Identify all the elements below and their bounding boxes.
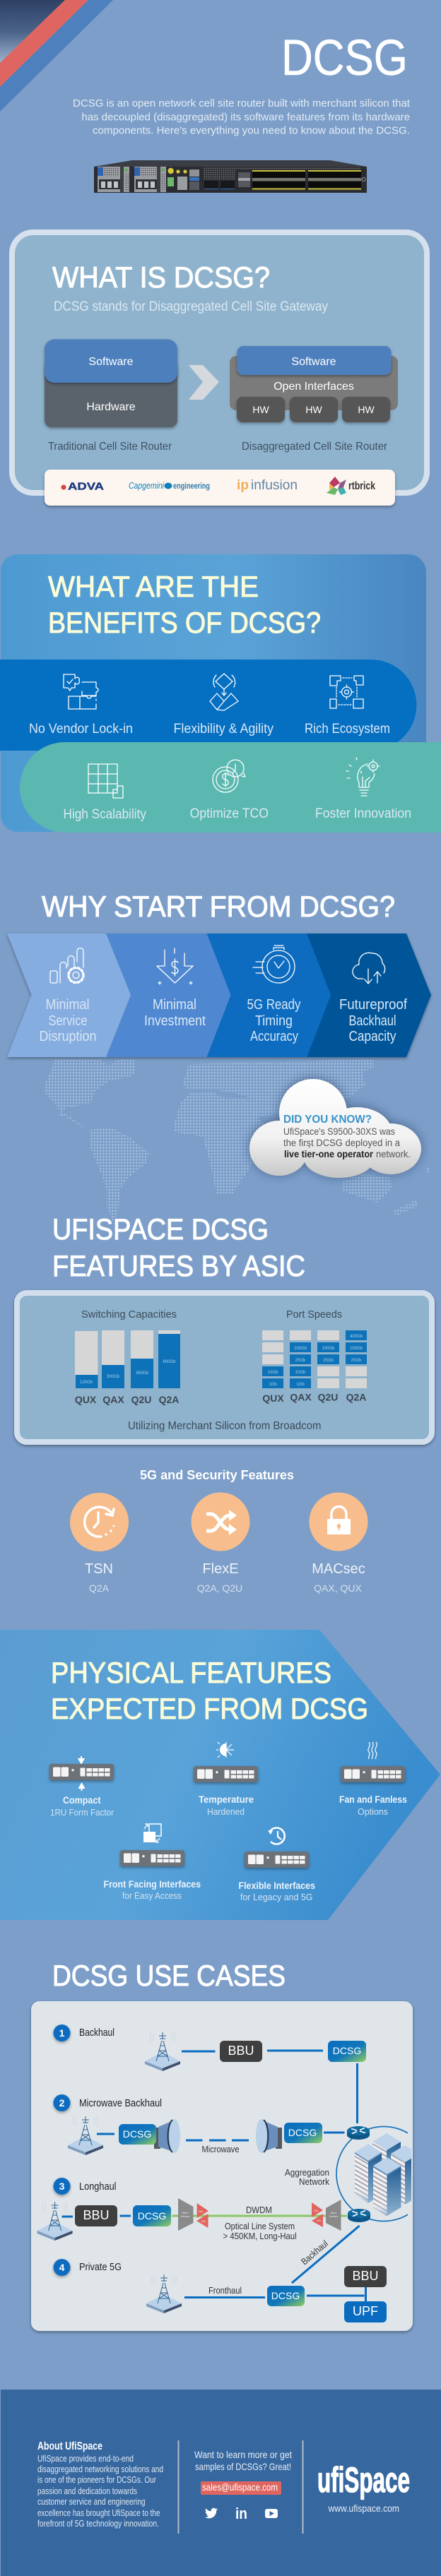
- diagram: traditional router: Hardware: [86, 401, 136, 413]
- callout: did you know cloud: the first DCSG deployed in a: [283, 1138, 400, 1148]
- feature: FlexE: Q2A, Q2U: [197, 1582, 242, 1594]
- use case 3: longhaul: Optical Line System: [225, 2221, 295, 2231]
- contact block: [194, 2449, 292, 2522]
- footer: [1, 2390, 441, 2576]
- callout: did you know cloud: live tier-one operator: [284, 1149, 374, 1159]
- chart: port speeds: 1Gb: [296, 1383, 305, 1387]
- use case 3: longhaul: OA: [199, 2210, 203, 2213]
- chart: switching capacities: Q2A: [159, 1394, 179, 1405]
- chart: port speeds: 100Gb: [294, 1347, 307, 1351]
- chart: switching capacities: 360Gb: [136, 1371, 149, 1376]
- use case 1: backhaul: BBU: [228, 2044, 254, 2058]
- feature: temperature hardened: Temperature: [199, 1794, 254, 1805]
- green band: [20, 742, 441, 833]
- benefit: rich ecosystem: Rich Ecosystem: [305, 722, 390, 737]
- icon: linkedin: in: [235, 2505, 247, 2522]
- callout: did you know cloud: [249, 1079, 421, 1178]
- use case 3: longhaul: OA: [314, 2209, 318, 2212]
- diagram: disaggregated router: [230, 346, 398, 422]
- chevron: minimal service disruption: Minimal: [45, 997, 89, 1013]
- feature: front facing interfaces: Front Facing Interfaces: [103, 1878, 201, 1890]
- heading: benefits: [48, 570, 321, 639]
- use case 3: longhaul: Longhaul: [79, 2181, 116, 2193]
- chevron: futureproof backhaul capacity: Backhaul: [349, 1013, 396, 1029]
- title: DCSG: DCSG: [281, 30, 408, 86]
- chart: port speeds: 400Gb: [350, 1335, 363, 1339]
- chart: port speeds: [262, 1308, 367, 1404]
- feature: compact: Compact: [63, 1794, 101, 1806]
- panel: use cases diagram: [31, 2001, 431, 2331]
- partner logo strip: ADVA: [68, 480, 104, 493]
- chevron: 5G ready timing accuracy: 5G Ready: [247, 997, 301, 1013]
- diagram: traditional router: [45, 339, 177, 427]
- chevron: futureproof backhaul capacity: [339, 953, 407, 1044]
- heading: features by ASIC: FEATURES BY ASIC: [52, 1249, 305, 1282]
- heading: features by ASIC: UFISPACE DCSG: [52, 1212, 269, 1246]
- chart: port speeds: 100Gb: [322, 1347, 335, 1351]
- blue band: [0, 660, 416, 751]
- callout: did you know cloud: DID YOU KNOW?: [283, 1114, 372, 1126]
- heading: use cases: DCSG USE CASES: [52, 1959, 286, 1992]
- chart: port speeds: 25Gb: [351, 1359, 362, 1363]
- diagram: traditional router: Software: [88, 356, 134, 368]
- chart: switching capacities: QAX: [102, 1394, 124, 1405]
- use case 2: microwave backhaul: Microwave: [202, 2144, 239, 2154]
- use case 4: private 5G: [54, 2259, 387, 2322]
- feature: fan and fanless: Fan and Fanless: [339, 1794, 407, 1805]
- feature: temperature hardened: [194, 1742, 258, 1817]
- feature: TSN: [70, 1493, 129, 1594]
- heading: features by ASIC: [52, 1212, 305, 1282]
- feature: fan and fanless: Options: [358, 1806, 388, 1817]
- benefit: foster innovation: Foster Innovation: [315, 806, 411, 821]
- chevron: 5G ready timing accuracy: [247, 946, 301, 1044]
- chart: port speeds: Q2U: [318, 1391, 338, 1402]
- diagram: disaggregated router: HW: [305, 404, 322, 415]
- partner logo strip: Capgemini: [129, 480, 165, 491]
- label: backhaul link: Backhaul: [299, 2238, 330, 2267]
- heading: what is DCSG: WHAT IS DCSG?: [52, 261, 270, 294]
- chevron: minimal service disruption: Disruption: [40, 1029, 96, 1044]
- chevron process: [7, 934, 431, 1057]
- router: bottom aggregation: [348, 2209, 370, 2222]
- chevron: minimal investment: Minimal: [153, 997, 196, 1013]
- use case 3: longhaul: OA: [317, 2219, 321, 2222]
- partner logo strip: ip: [237, 478, 249, 493]
- use case 2: microwave backhaul: Microwave Backhaul: [79, 2097, 162, 2109]
- feature: TSN: TSN: [85, 1561, 113, 1577]
- intro text block: has decoupled (disaggregated) its software features from its hardware: [82, 112, 410, 123]
- world map dots: [44, 1059, 430, 1222]
- chart: port speeds: 1Gb: [269, 1383, 277, 1387]
- use case 3: longhaul: Demux: [181, 2214, 189, 2218]
- chart: switching capacities: 120Gb: [80, 1381, 93, 1385]
- diagram: disaggregated router: Software: [291, 356, 336, 368]
- about text block: is one of the pioneers for DCSGs. Our: [37, 2475, 156, 2485]
- panel: ASIC charts: [17, 1293, 432, 1442]
- callout: did you know cloud: network.: [376, 1149, 411, 1159]
- heading: benefits: WHAT ARE THE: [48, 570, 259, 603]
- use case 1: backhaul: [54, 2025, 366, 2071]
- chevron: minimal service disruption: [40, 948, 96, 1044]
- use case 4: private 5G: Fronthaul: [208, 2285, 242, 2296]
- chart: switching capacities: Switching Capacities: [81, 1308, 177, 1320]
- feature: FlexE: FlexE: [202, 1561, 239, 1577]
- intro text block: [73, 98, 410, 137]
- use case 4: private 5G: Private 5G: [79, 2261, 122, 2273]
- chevron: futureproof backhaul capacity: Capacity: [349, 1029, 396, 1044]
- use case 3: longhaul: 3: [59, 2181, 65, 2192]
- chart: port speeds: Q2A: [346, 1391, 366, 1402]
- heading: 5G and security features: 5G and Security Features: [140, 1468, 294, 1482]
- use case 4: private 5G: UPF: [353, 2304, 378, 2318]
- contact block: samples of DCSGs? Great!: [195, 2461, 291, 2472]
- chart: switching capacities: QUX: [75, 1394, 97, 1405]
- use case 3: longhaul: DWDM: [246, 2205, 272, 2215]
- benefit: no vendor lock-in: No Vendor Lock-in: [29, 722, 133, 737]
- benefit: optimize TCO: Optimize TCO: [190, 806, 269, 821]
- caption: merchant silicon: Utilizing Merchant Silicon from Broadcom: [128, 1420, 321, 1432]
- aggregation network ring: [336, 2125, 408, 2222]
- heading: physical features: [51, 1656, 368, 1725]
- about text block: excellence has brought UfiSpace to the: [37, 2508, 160, 2518]
- feature: TSN: Q2A: [89, 1582, 110, 1594]
- connection lines: [62, 2051, 366, 2301]
- label: aggregation network: Network: [299, 2176, 329, 2187]
- feature: flexible interfaces: Flexible Interfaces: [239, 1880, 315, 1891]
- benefit: rich ecosystem: [305, 676, 390, 737]
- label: traditional router: Traditional Cell Site Router: [48, 441, 172, 453]
- benefit: high scalability: [64, 764, 146, 822]
- corner stripes: [0, 0, 113, 112]
- use case 3: longhaul: OA: [201, 2219, 206, 2223]
- feature: compact: [49, 1756, 114, 1818]
- use case 2: microwave backhaul: DCSG: [123, 2128, 151, 2140]
- use case 3: longhaul: Mux/: [331, 2211, 337, 2214]
- use case 3: longhaul: BBU: [83, 2208, 110, 2222]
- heading: why start from DCSG: WHY START FROM DCSG?: [42, 890, 395, 923]
- chart: port speeds: Port Speeds: [286, 1308, 342, 1320]
- benefit: optimize TCO: [190, 760, 269, 821]
- label: disaggregated router: Disaggregated Cell Site Router: [242, 441, 388, 453]
- feature: MACsec: [310, 1493, 368, 1594]
- about text block: About UfiSpace: [37, 2440, 102, 2452]
- benefit: no vendor lock-in: [29, 674, 133, 737]
- label: aggregation network: Aggregation: [285, 2167, 329, 2178]
- use case 2: microwave backhaul: DCSG: [288, 2127, 317, 2138]
- website: www.ufispace.com: [328, 2503, 399, 2514]
- panel: what is DCSG: [12, 232, 427, 506]
- chart: port speeds: QAX: [290, 1391, 312, 1402]
- router hardware image: [94, 160, 367, 193]
- callout: did you know cloud: UfiSpace's S9500-30XS was: [283, 1126, 395, 1137]
- benefit: foster innovation: [315, 758, 411, 821]
- chevron: minimal investment: [144, 948, 206, 1029]
- diagram: disaggregated router: HW: [358, 404, 375, 415]
- heading: physical features: PHYSICAL FEATURES: [51, 1656, 331, 1689]
- about text block: forefront of 5G technology innovation.: [37, 2519, 159, 2529]
- use case 1: backhaul: Backhaul: [79, 2027, 114, 2039]
- chevron: minimal investment: Investment: [144, 1013, 206, 1029]
- chevron: 5G ready timing accuracy: Accuracy: [250, 1029, 298, 1044]
- benefit: flexibility and agility: [174, 674, 274, 737]
- use case 4: private 5G: BBU: [352, 2269, 379, 2283]
- use case 4: private 5G: 4: [59, 2262, 65, 2273]
- use case 3: longhaul: Demux: [329, 2214, 338, 2218]
- heading: benefits: BENEFITS OF DCSG?: [48, 606, 321, 639]
- chart: port speeds: 100Gb: [350, 1347, 363, 1351]
- use case 1: backhaul: DCSG: [333, 2045, 361, 2056]
- contact block: Want to learn more or get: [194, 2449, 292, 2460]
- optical line: [172, 2214, 347, 2217]
- chevron: futureproof backhaul capacity: Futureproof: [339, 997, 407, 1013]
- arrow: chevron: [189, 365, 219, 400]
- feature: temperature hardened: Hardened: [207, 1806, 245, 1817]
- feature: fan and fanless: [339, 1742, 407, 1817]
- intro text block: DCSG is an open network cell site router built with merchant silicon that: [73, 98, 410, 109]
- feature: MACsec: MACsec: [312, 1561, 365, 1577]
- chart: switching capacities: 300Gb: [107, 1375, 120, 1379]
- panel: physical features: [0, 1630, 440, 1920]
- feature: flexible interfaces: [239, 1827, 315, 1902]
- chart: switching capacities: 800Gb: [163, 1360, 176, 1364]
- panel: benefits of DCSG: [0, 554, 441, 833]
- about text block: [37, 2440, 163, 2529]
- use case 2: microwave backhaul: 2: [59, 2097, 65, 2109]
- icon: twitter: [205, 2508, 218, 2518]
- feature: compact: 1RU Form Factor: [50, 1807, 114, 1818]
- feature: FlexE: [191, 1493, 250, 1594]
- feature: flexible interfaces: for Legacy and 5G: [240, 1892, 312, 1902]
- heading: physical features: EXPECTED FROM DCSG: [51, 1692, 368, 1725]
- partner logo strip: engineering: [173, 481, 210, 491]
- email button: sales@ufispace.com: [202, 2482, 278, 2493]
- use case 3: longhaul: DCSG: [138, 2210, 166, 2222]
- diagram: disaggregated router: HW: [252, 404, 269, 415]
- diagram: disaggregated router: Open Interfaces: [274, 381, 354, 393]
- chevron: minimal service disruption: Service: [48, 1013, 88, 1029]
- partner logo strip: rtbrick: [348, 480, 375, 492]
- chart: port speeds: 25Gb: [295, 1359, 306, 1363]
- use case 4: private 5G: DCSG: [271, 2290, 300, 2301]
- benefit: high scalability: High Scalability: [64, 807, 146, 822]
- use case 3: longhaul: [37, 2178, 341, 2241]
- icon: youtube: [265, 2509, 278, 2518]
- use case 2: microwave backhaul: [54, 2094, 322, 2155]
- about text block: disaggregated networking solutions and: [37, 2464, 163, 2474]
- about text block: UfiSpace provides end-to-end: [37, 2454, 134, 2464]
- use case 3: longhaul: Mux/: [182, 2211, 189, 2214]
- chart: port speeds: 10Gb: [295, 1371, 306, 1375]
- chart: port speeds: 10Gb: [268, 1371, 278, 1375]
- use case 3: longhaul: > 450KM, Long-Haul: [223, 2231, 297, 2241]
- benefit: flexibility and agility: Flexibility & Agility: [174, 722, 274, 737]
- partner logo strip: [45, 470, 395, 506]
- feature: front facing interfaces: [103, 1824, 201, 1901]
- use case 1: backhaul: 1: [59, 2027, 65, 2039]
- feature: MACsec: QAX, QUX: [314, 1582, 363, 1594]
- chart: switching capacities: Q2U: [131, 1394, 151, 1405]
- about text block: customer service and engineering: [37, 2497, 146, 2507]
- label: aggregation network: [285, 2167, 329, 2187]
- subheading: DCSG stands for Disaggregated Cell Site Gateway: [54, 299, 328, 314]
- partner logo strip: infusion: [251, 478, 298, 493]
- chevron: 5G ready timing accuracy: Timing: [255, 1013, 293, 1029]
- about text block: passion and dedication towards: [37, 2486, 137, 2496]
- intro text block: components. Here's everything you need to know about the DCSG.: [93, 126, 410, 137]
- aggregation buildings: [355, 2133, 411, 2216]
- chart: switching capacities: [75, 1308, 180, 1405]
- chart: port speeds: QUX: [262, 1393, 284, 1404]
- router: top aggregation: [347, 2126, 370, 2140]
- feature: front facing interfaces: for Easy Access: [122, 1890, 182, 1901]
- chart: port speeds: 25Gb: [323, 1359, 334, 1363]
